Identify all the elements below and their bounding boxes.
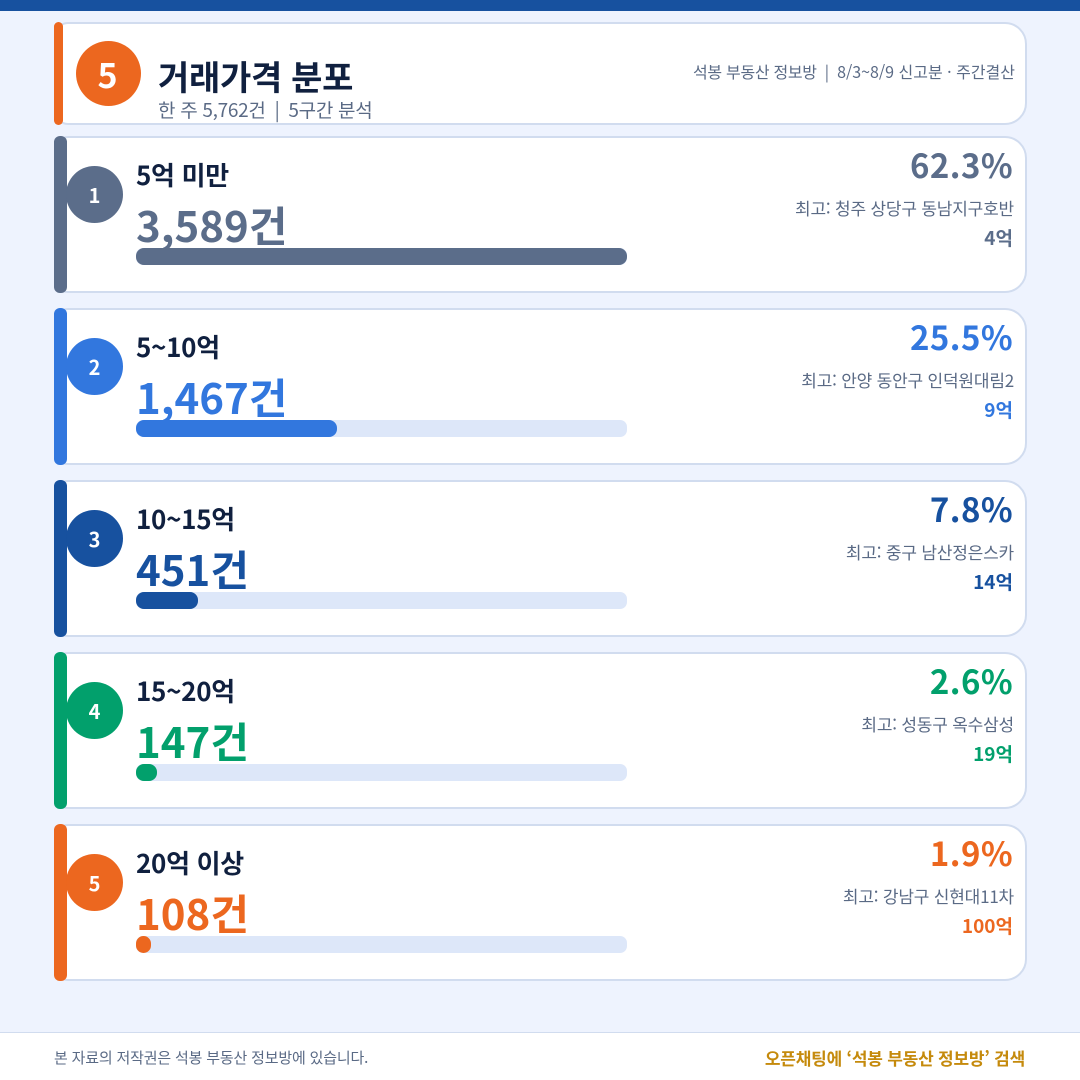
progress bar (136, 592, 627, 609)
progress bar (136, 420, 627, 437)
source and period note: 석봉 부동산 정보방 8/3~8/9 신고분 · 주간결산 (693, 59, 1015, 83)
icon: section number badge (76, 41, 141, 106)
share percent: 25.5% (910, 312, 1013, 360)
accent bar (54, 136, 67, 293)
accent bar (54, 652, 67, 809)
subtitle: | (275, 96, 279, 123)
panel: 500 million to 1 billion (54, 308, 1027, 465)
title: 거래가격 분포 (158, 51, 353, 100)
accent bar (54, 824, 67, 981)
bracket label: 15~20억 (136, 672, 235, 709)
open chat call to action: 오픈채팅에 ‘석봉 부동산 정보방’ 검색 (765, 1045, 1025, 1070)
top price: 14억 (973, 568, 1013, 595)
transaction count: 3,589건 (136, 194, 287, 255)
rank badge (66, 854, 123, 911)
card background (54, 824, 1027, 981)
top price: 100억 (962, 912, 1013, 939)
rank badge: 5 (89, 868, 100, 897)
share percent: 2.6% (930, 656, 1013, 704)
copyright notice: 본 자료의 저작권은 석봉 부동산 정보방에 있습니다. (54, 1047, 368, 1068)
top price: 4억 (984, 224, 1013, 251)
top price: 19억 (973, 740, 1013, 767)
panel: 1 to 1.5 billion (54, 480, 1027, 637)
bracket label: 5억 미만 (136, 156, 229, 193)
bracket label: 10~15억 (136, 500, 235, 537)
bracket label: 20억 이상 (136, 844, 244, 881)
panel: under 500 million (54, 136, 1027, 293)
accent bar (54, 480, 67, 637)
rank badge: 1 (89, 180, 100, 209)
rank badge (66, 166, 123, 223)
share percent: 62.3% (910, 140, 1013, 188)
transaction count: 147건 (136, 710, 249, 771)
subtitle: 한 주 5,762건 5구간 분석 (158, 96, 372, 123)
transaction count: 108건 (136, 882, 249, 943)
top transaction: 최고: 안양 동안구 인덕원대림2 (801, 367, 1014, 392)
card background (54, 136, 1027, 293)
transaction count: 1,467건 (136, 366, 287, 427)
source and period note: | (825, 59, 829, 83)
top transaction: 최고: 청주 상당구 동남지구호반 (795, 195, 1014, 220)
header card background (54, 22, 1027, 125)
top transaction: 최고: 강남구 신현대11차 (843, 883, 1014, 908)
card background (54, 480, 1027, 637)
progress bar (136, 764, 627, 781)
footer (0, 1032, 1080, 1080)
share percent: 7.8% (930, 484, 1013, 532)
share percent: 1.9% (930, 828, 1013, 876)
top transaction: 최고: 성동구 옥수삼성 (861, 711, 1014, 736)
transaction count: 451건 (136, 538, 249, 599)
card background (54, 652, 1027, 809)
panel: 1.5 to 2 billion (54, 652, 1027, 809)
rank badge (66, 682, 123, 739)
icon: section number badge: 5 (97, 49, 118, 98)
progress bar (136, 936, 627, 953)
rank badge: 2 (89, 352, 100, 381)
progress bar (136, 248, 627, 265)
top transaction: 최고: 중구 남산정은스카 (846, 539, 1014, 564)
panel: header (54, 22, 1027, 125)
top price: 9억 (984, 396, 1013, 423)
bracket label: 5~10억 (136, 328, 220, 365)
rank badge (66, 338, 123, 395)
panel: over 2 billion (54, 824, 1027, 981)
card background (54, 308, 1027, 465)
rank badge (66, 510, 123, 567)
rank badge: 4 (89, 696, 100, 725)
accent bar (54, 308, 67, 465)
rank badge: 3 (89, 524, 100, 553)
header accent bar (54, 22, 63, 125)
top accent band (0, 0, 1080, 11)
